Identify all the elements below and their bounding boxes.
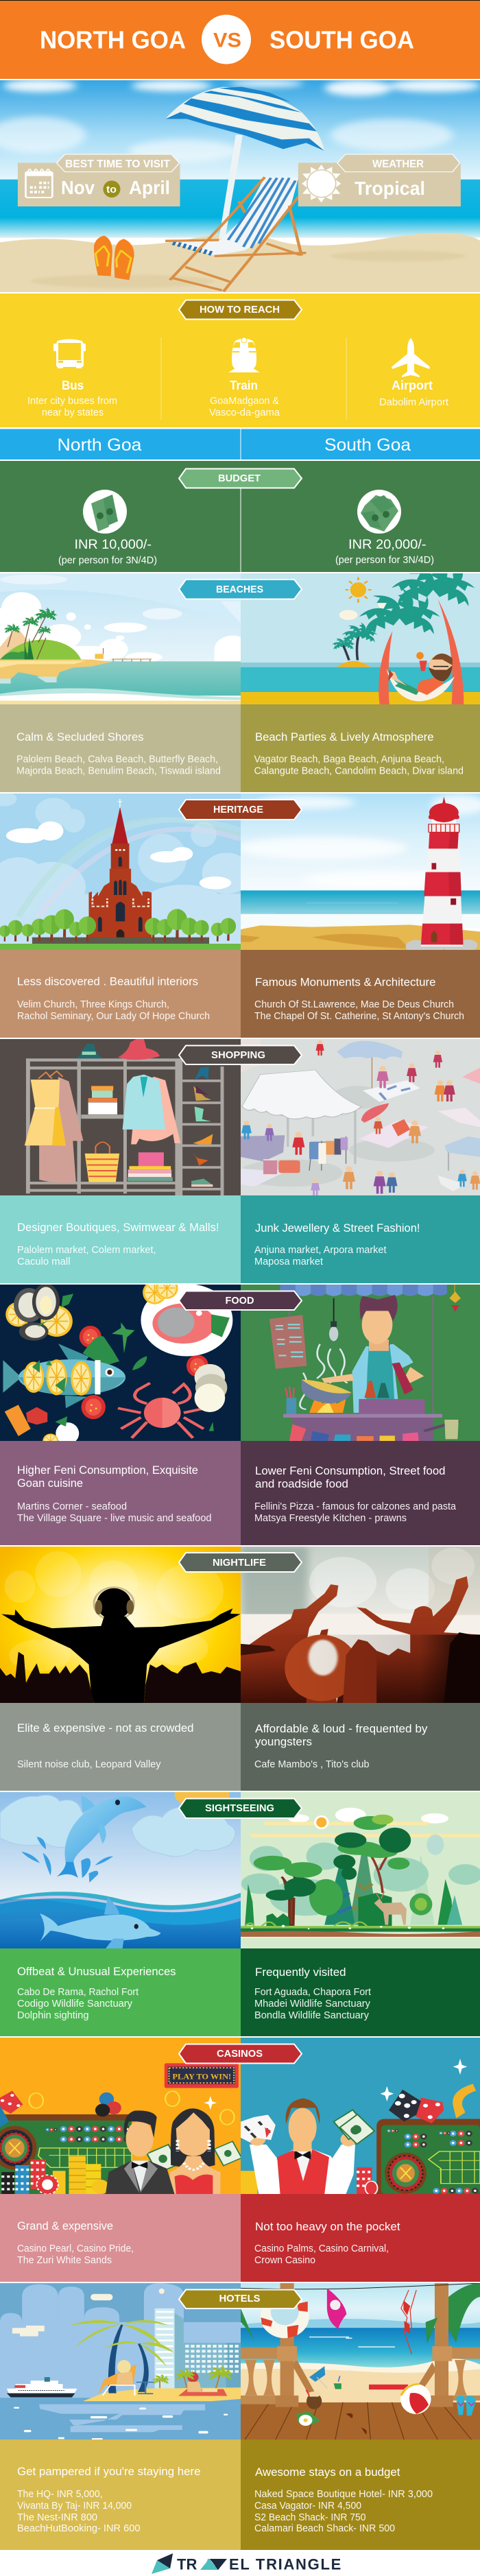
icon: train (228, 337, 260, 372)
panel: south food text: and roadside food (255, 1478, 348, 1490)
panel: north food text (0, 1441, 241, 1545)
train: Vasco-da-gama (209, 407, 280, 418)
south budget (335, 490, 434, 566)
icon: deck chair (165, 177, 306, 291)
section: hotels (0, 2283, 480, 2550)
best time text: BEST TIME TO VISIT (65, 158, 170, 170)
bus: Bus (62, 379, 84, 392)
panel: south heritage text (241, 950, 480, 1038)
panel: north casinos text: Casino Pearl, Casino Pride, (17, 2243, 134, 2254)
illustration: wardrobe (0, 1039, 241, 1195)
panel: north food text: The Village Square - live music and seafood (17, 1512, 211, 1524)
banner: nightlife: NIGHTLIFE (213, 1557, 266, 1569)
panel: weather (298, 154, 461, 206)
panel: north sightseeing text: Codigo Wildlife Sanctuary (17, 1998, 132, 2009)
best time text: Nov (61, 177, 95, 198)
section: beaches (0, 559, 480, 792)
section: nightlife (0, 1547, 480, 1791)
airport: Dabolim Airport (379, 396, 449, 408)
train: Train (230, 379, 258, 392)
banner: how to reach (179, 300, 302, 320)
bus (27, 339, 117, 418)
panel: how to reach (0, 294, 480, 427)
illustration: party crowd (241, 1547, 480, 1703)
footer logo: Travel Triangle: A (204, 2555, 215, 2573)
banner: budget (179, 469, 302, 488)
panel: south nightlife text: Affordable & loud - frequented by (255, 1723, 428, 1735)
hero beach illustration (0, 80, 480, 292)
banner: heritage (179, 800, 302, 820)
panel: best time to visit (18, 154, 180, 206)
section: sightseeing (0, 1780, 480, 2036)
panel: south sightseeing text: Bondla Wildlife Sanctuary (254, 2009, 369, 2021)
weather text (355, 158, 425, 199)
panel: north heritage text: Rachol Seminary, Our Lady Of Hope Church (17, 1010, 210, 1022)
panel: south hotels text: S2 Beach Shack- INR 750 (254, 2512, 366, 2523)
panel: north sightseeing text: Offbeat & Unusual Experiences (17, 1966, 176, 1978)
title: South Goa: SOUTH GOA (269, 26, 414, 53)
panel: north hotels text (0, 2440, 241, 2550)
banner: hotels: HOTELS (219, 2293, 261, 2304)
illustration: seafood (0, 1285, 241, 1441)
icon: triangle mark (152, 2553, 173, 2574)
panel: north beaches text (0, 704, 241, 792)
panel: south hotels text: Awesome stays on a budget (255, 2466, 400, 2479)
section: shopping (0, 1039, 480, 1283)
panel: south casinos text (241, 2194, 480, 2282)
footer logo: Travel Triangle (152, 2553, 342, 2574)
banner: shopping (179, 1045, 302, 1064)
panel: north casinos text (0, 2194, 241, 2282)
illustration: dj silhouette (0, 1547, 241, 1703)
panel: south hotels text: Casa Vagator- INR 4,500 (254, 2500, 361, 2512)
banner: budget: BUDGET (218, 473, 261, 484)
panel: south beaches text: Calangute Beach, Candolim Beach, Divar island (254, 765, 464, 776)
panel: north food text: Martins Corner - seafood (17, 1501, 127, 1512)
panel: south casinos text: Casino Palms, Casino Carnival, (254, 2243, 389, 2254)
banner: hotels (179, 2289, 302, 2309)
bus: Inter city buses from (27, 395, 117, 407)
train: GoaMadgaon & (210, 395, 279, 407)
illustration: casino dealer (241, 2038, 480, 2194)
panel: south hotels text: Naked Space Boutique Hotel- INR 3,000 (254, 2488, 433, 2500)
vs badge: VS (213, 29, 241, 52)
panel: south casinos text: Crown Casino (254, 2254, 315, 2266)
panel: north hotels text: BeachHutBooking- INR 600 (17, 2523, 140, 2534)
panel: south food text: Fellini's Pizza - famous for calzones and pasta (254, 1501, 457, 1512)
south budget: INR 20,000/- (348, 538, 427, 552)
panel: north heritage text: Less discovered . Beautiful interiors (17, 975, 198, 988)
best time text: to (106, 184, 117, 195)
vs badge (202, 15, 251, 64)
header: north goa / south goa (0, 429, 480, 460)
section: heritage (0, 791, 480, 1038)
panel: south nightlife text: youngsters (255, 1736, 312, 1748)
illustration: street cook (241, 1285, 480, 1441)
panel: north beaches text: Calm & Secluded Shores (16, 731, 144, 743)
weather text: Tropical (355, 178, 425, 199)
sign: play to win (165, 2063, 239, 2088)
panel: north nightlife text (0, 1703, 241, 1791)
section: casinos (0, 2038, 480, 2282)
panel: north sightseeing text: Dolphin sighting (17, 2009, 89, 2021)
panel: north nightlife text: Elite & expensive - not as crowded (17, 1722, 193, 1734)
ship (7, 2377, 77, 2397)
panel: north casinos text: Grand & expensive (17, 2220, 113, 2232)
panel: north shopping text: Designer Boutiques, Swimwear & Malls! (17, 1221, 219, 1234)
header: north goa / south goa: South Goa (324, 436, 411, 455)
panel: south beaches text: Vagator Beach, Baga Beach, Anjuna Beach, (254, 753, 444, 765)
panel: south heritage text: Church Of St.Lawrence, Mae De Deus Church (254, 999, 454, 1010)
title: North Goa: NORTH GOA (40, 26, 186, 53)
panel: north heritage text (0, 950, 241, 1038)
icon: parasol (165, 87, 324, 239)
icon: flip flops (94, 235, 134, 280)
panel: south hotels text (241, 2440, 480, 2550)
illustration: veranda (241, 2283, 480, 2440)
icon: banknotes (357, 490, 401, 534)
illustration: flea market (241, 1039, 480, 1195)
panel: north food text: Higher Feni Consumption, Exquisite (17, 1464, 198, 1477)
banner: food: FOOD (225, 1295, 254, 1307)
panel: south shopping text: Junk Jewellery & Street Fashion! (255, 1222, 420, 1235)
panel: south sightseeing text: Fort Aguada, Chapora Fort (254, 1986, 372, 1998)
footer logo: Travel Triangle: EL TRIANGLE (229, 2555, 342, 2573)
panel: north casinos text: The Zuri White Sands (17, 2254, 112, 2266)
panel: south heritage text: Famous Monuments & Architecture (255, 977, 436, 989)
panel: north shopping text: Palolem market, Colem market, (17, 1244, 156, 1256)
panel: north hotels text: Vivanta By Taj- INR 14,000 (17, 2500, 132, 2512)
banner: beaches (179, 580, 302, 599)
illustration: casino couple (0, 2038, 241, 2194)
illustration: island beach (0, 573, 241, 704)
north budget (58, 490, 157, 567)
panel: south shopping text (241, 1195, 480, 1283)
header: north goa / south goa: North Goa (58, 436, 142, 455)
north budget: INR 10,000/- (74, 538, 152, 552)
banner: casinos (179, 2044, 302, 2063)
panel: south casinos text: Not too heavy on the pocket (255, 2221, 400, 2233)
panel: north hotels text: The HQ- INR 5,000, (17, 2488, 103, 2500)
panel: south sightseeing text: Frequently visited (255, 1966, 346, 1979)
illustration: hammock beach (241, 573, 480, 704)
panel: south food text: Matsya Freestyle Kitchen - prawns (254, 1512, 407, 1524)
train (209, 337, 280, 418)
panel: south shopping text: Maposa market (254, 1256, 324, 1267)
banner: sightseeing: SIGHTSEEING (205, 1802, 274, 1814)
icon: calendar (26, 169, 52, 198)
footer logo: Travel Triangle: TR (177, 2555, 197, 2573)
panel: south heritage text: The Chapel Of St. Catherine, St Antony's Church (254, 1010, 464, 1022)
panel: north sightseeing text: Cabo De Rama, Rachol Fort (17, 1986, 139, 1998)
panel: budget (0, 461, 480, 572)
banner: nightlife (179, 1553, 302, 1572)
illustration: lighthouse (241, 794, 480, 950)
banner: beaches: BEACHES (216, 584, 263, 595)
icon: banknotes (83, 490, 127, 534)
illustration: dolphins (0, 1792, 241, 1948)
panel: north sightseeing text (0, 1948, 241, 2036)
panel: south food text: Lower Feni Consumption, Street food (255, 1465, 446, 1477)
logo triangles replacing A and V (200, 2559, 227, 2570)
panel: south shopping text: Anjuna market, Arpora market (254, 1244, 387, 1256)
airport (379, 338, 449, 408)
panel: north shopping text: Caculo mall (17, 1256, 70, 1267)
title banner (0, 0, 480, 79)
best time text (61, 158, 170, 198)
banner: shopping: SHOPPING (211, 1049, 265, 1061)
panel: north food text: Goan cuisine (17, 1477, 83, 1490)
panel: north beaches text: Majorda Beach, Benulim Beach, Tiswadi island (16, 765, 221, 776)
bus: near by states (42, 407, 104, 418)
banner: how to reach: HOW TO REACH (200, 304, 280, 315)
north budget: (per person for 3N/4D) (58, 554, 157, 567)
icon: airplane (392, 338, 430, 377)
panel: south hotels text: Calamari Beach Shack- INR 500 (254, 2523, 395, 2534)
best time text: April (129, 177, 170, 198)
panel: north hotels text: The Nest-INR 800 (17, 2512, 97, 2523)
sunbather right (178, 2372, 227, 2396)
icon: sun (302, 165, 341, 202)
banner: heritage: HERITAGE (213, 804, 263, 815)
weather text: WEATHER (372, 158, 424, 170)
panel: north nightlife text: Silent noise club, Leopard Valley (17, 1758, 161, 1770)
panel: north heritage text: Velim Church, Three Kings Church, (17, 999, 169, 1010)
panel: south beaches text (241, 704, 480, 792)
illustration: church (0, 794, 241, 950)
panel: south nightlife text (241, 1703, 480, 1791)
panel: north beaches text: Palolem Beach, Calva Beach, Butterfly Beach, (16, 753, 218, 765)
panel: south sightseeing text: Mhadei Wildlife Sanctuary (254, 1998, 370, 2009)
section: food (0, 1277, 480, 1545)
banner: sightseeing (179, 1798, 302, 1818)
icon: bus (53, 339, 86, 368)
panel: north hotels text: Get pampered if you're staying here (17, 2466, 200, 2478)
panel: south nightlife text: Cafe Mambo's , Tito's club (254, 1758, 369, 1770)
panel: south beaches text: Beach Parties & Lively Atmosphere (255, 731, 433, 743)
illustration: forest (241, 1792, 480, 1948)
sunbather left (98, 2360, 136, 2396)
airport: Airport (392, 379, 433, 392)
panel: south food text (241, 1441, 480, 1545)
south budget: (per person for 3N/4D) (335, 554, 434, 566)
panel: south sightseeing text (241, 1948, 480, 2036)
banner: food (179, 1291, 302, 1310)
banner: casinos: CASINOS (217, 2048, 263, 2060)
illustration: resort (0, 2283, 241, 2440)
panel: north shopping text (0, 1195, 241, 1283)
footer logo: Travel Triangle: V (213, 2555, 223, 2573)
